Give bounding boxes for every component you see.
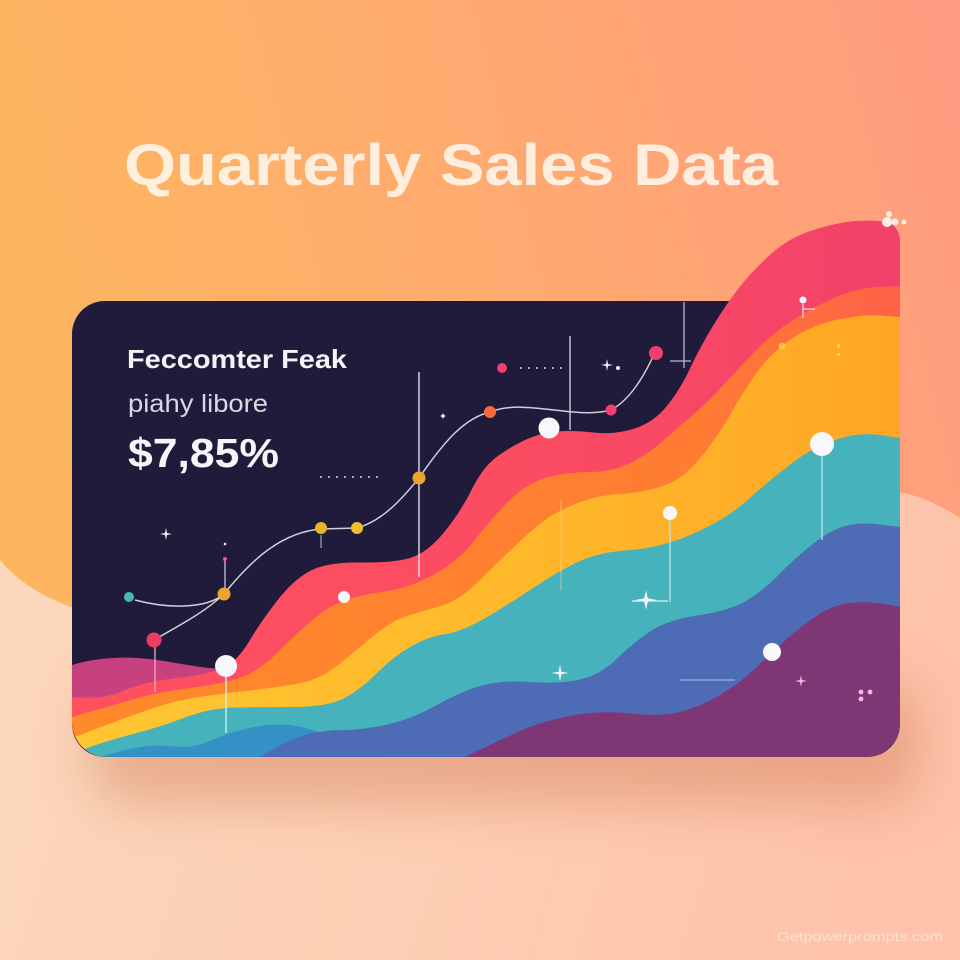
rainbow stacked area chart bbox=[72, 221, 900, 757]
line chart with markers bbox=[124, 296, 834, 733]
dotted guides bbox=[320, 368, 562, 477]
guide lines bbox=[155, 302, 822, 733]
area: magenta bbox=[72, 658, 216, 698]
pink sparkle and dots bbox=[795, 675, 872, 701]
title: Quarterly Sales Data bbox=[124, 133, 779, 198]
area: teal bbox=[72, 434, 900, 757]
card shadow bbox=[90, 680, 920, 805]
stat value: $7,85% bbox=[128, 430, 279, 476]
area: yellow bbox=[72, 315, 900, 757]
yellow accents bbox=[778, 342, 840, 356]
sparkles and small dots bbox=[160, 211, 906, 701]
panel: dark chart card bbox=[72, 301, 900, 757]
stat heading: Feccomter Feak bbox=[127, 344, 348, 374]
area: red bbox=[72, 221, 900, 757]
background peach wave bbox=[0, 491, 960, 960]
area: blue bbox=[260, 524, 900, 757]
stat subheading: piahy libore bbox=[128, 390, 268, 418]
area: orange bbox=[72, 286, 900, 757]
area: purple bbox=[465, 602, 900, 757]
watermark: Getpowerprompts.com bbox=[777, 929, 943, 944]
white sparkles bbox=[160, 359, 657, 681]
white markers bbox=[215, 296, 834, 677]
text block: card stats bbox=[127, 344, 348, 476]
area: light blue bbox=[100, 724, 340, 757]
data points bbox=[124, 346, 663, 648]
top right ornament bbox=[882, 211, 906, 227]
trend line bbox=[135, 352, 655, 640]
